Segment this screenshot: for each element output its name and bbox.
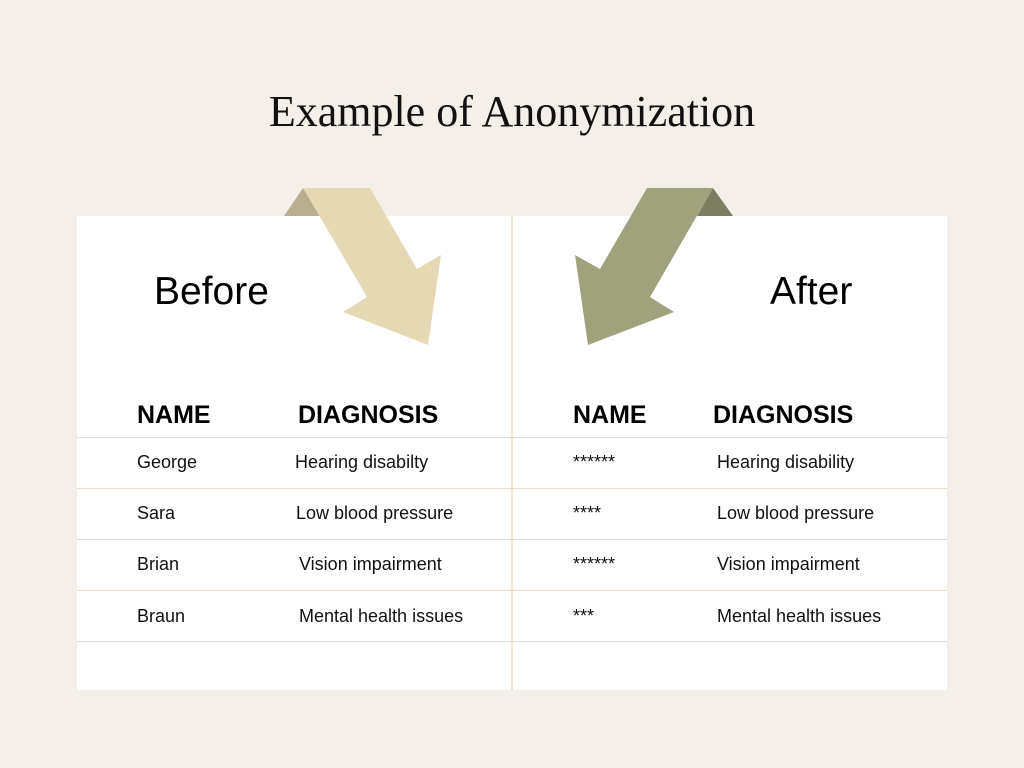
rows: before: Brian — [137, 554, 179, 574]
heading: before: Before — [154, 270, 269, 313]
column headers: NAME — [137, 401, 211, 429]
rows: before: Mental health issues — [299, 606, 463, 626]
rows: after: Vision impairment — [717, 554, 860, 574]
rows: after: *** — [573, 606, 594, 626]
rows: after: **** — [573, 503, 601, 523]
rows: before: Sara — [137, 503, 175, 523]
rows: after: Hearing disability — [717, 452, 854, 472]
column headers: NAME — [573, 401, 647, 429]
rows: before: Hearing disabilty — [295, 452, 428, 472]
column headers: DIAGNOSIS — [298, 401, 438, 429]
rows: after: ****** — [573, 554, 615, 574]
rows: after: Mental health issues — [717, 606, 881, 626]
rows: before: Braun — [137, 606, 185, 626]
panel: table — [77, 216, 947, 690]
rows: after: Low blood pressure — [717, 503, 874, 523]
column headers: DIAGNOSIS — [713, 401, 853, 429]
heading: after: After — [770, 270, 852, 313]
rows: before: Vision impairment — [299, 554, 442, 574]
rows: before: George — [137, 452, 197, 472]
title: Example of Anonymization — [269, 87, 755, 136]
rows: before: Low blood pressure — [296, 503, 453, 523]
rows: after: ****** — [573, 452, 615, 472]
